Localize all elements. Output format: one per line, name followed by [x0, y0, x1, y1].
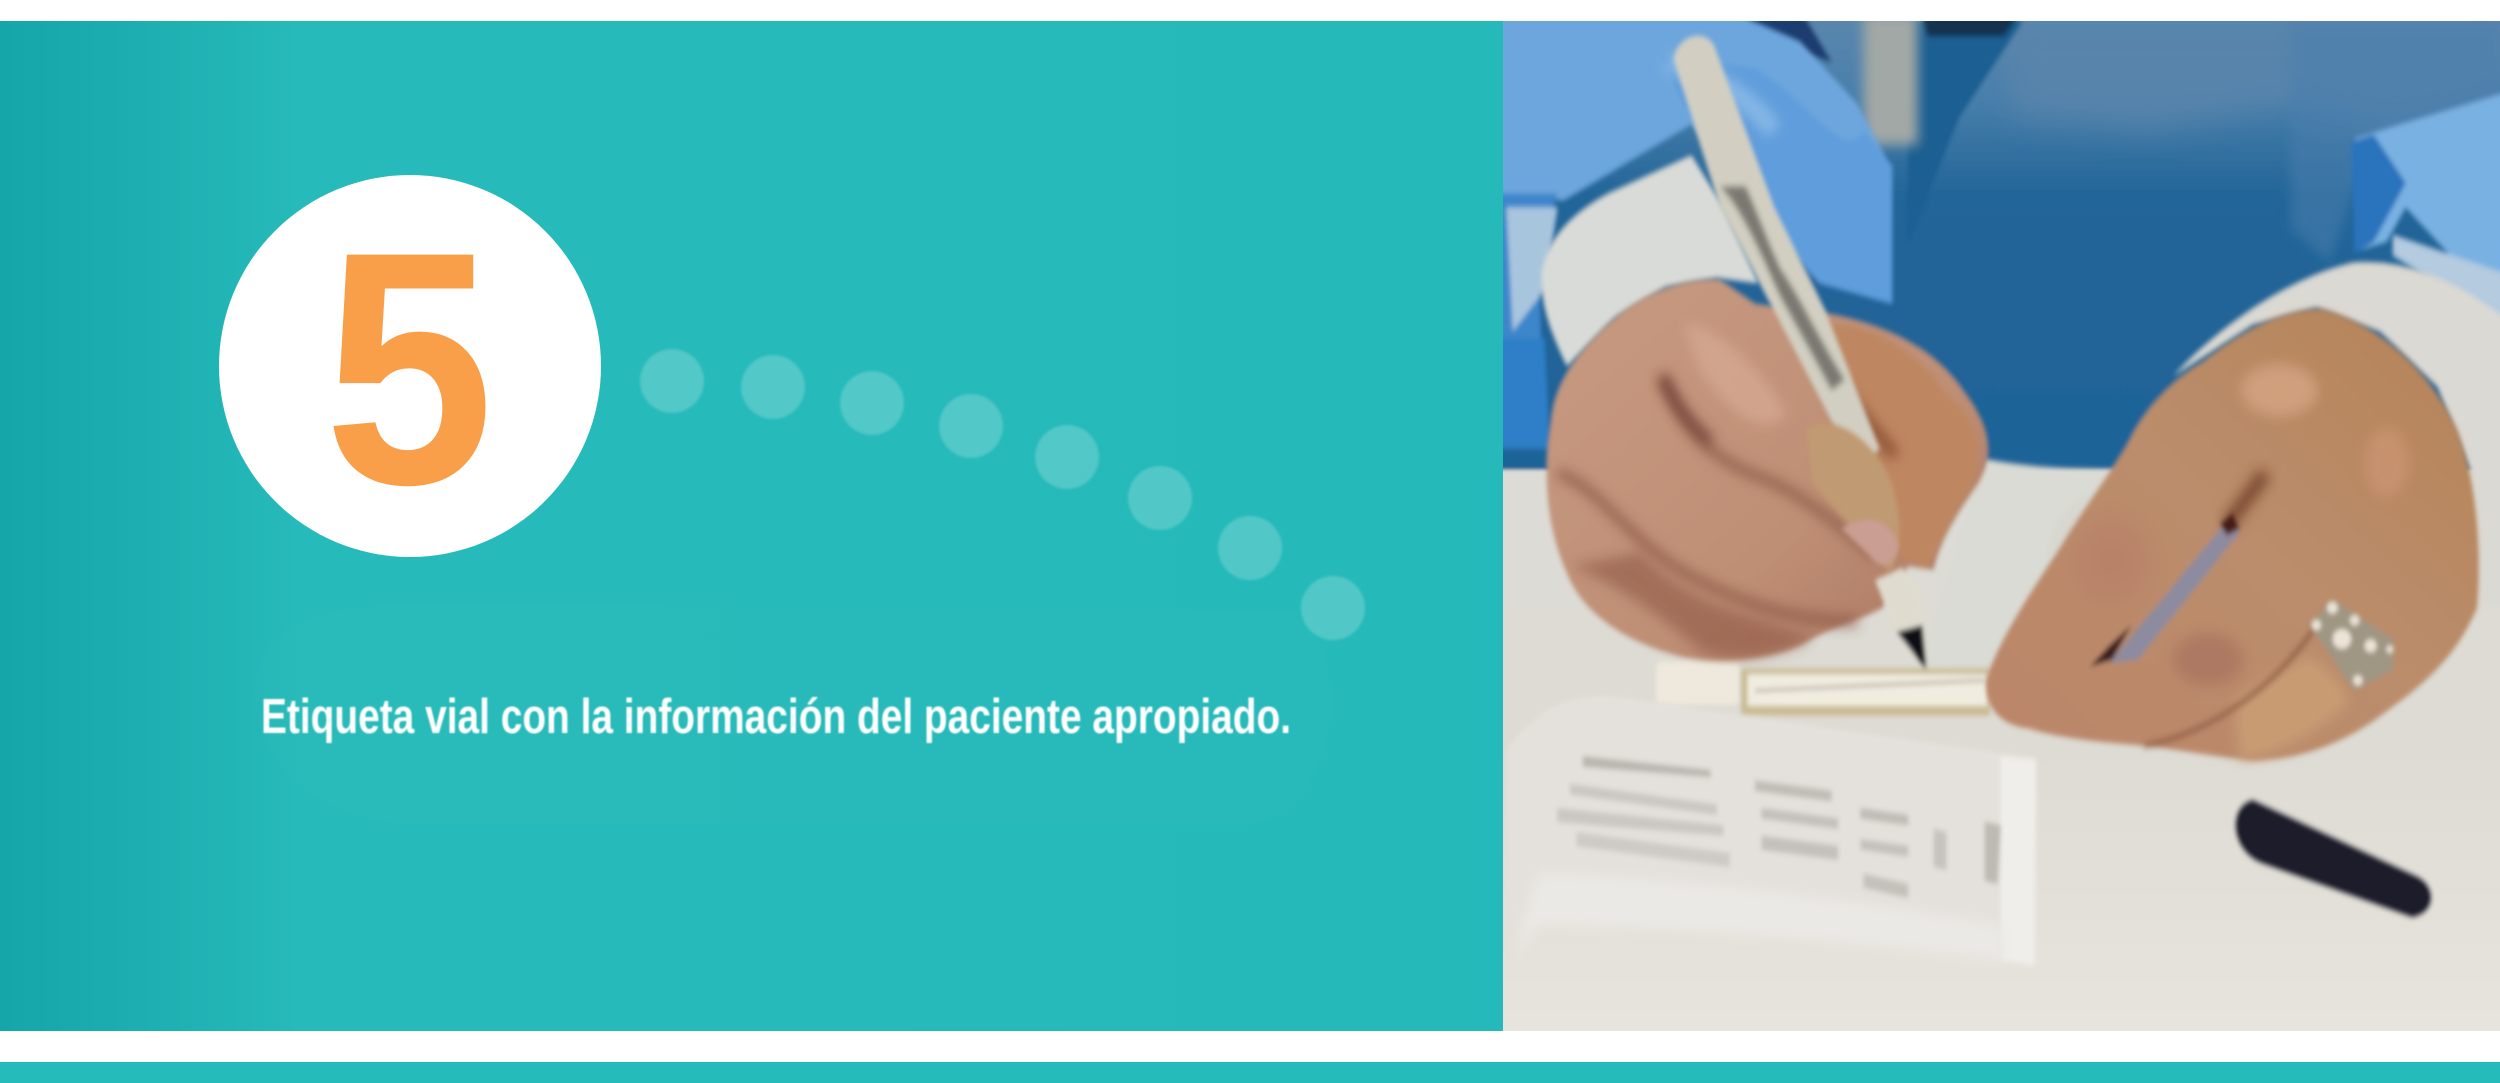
thumb over pen [1806, 424, 1899, 573]
number badge: 5 [324, 182, 494, 554]
left sleeve [1487, 14, 1892, 449]
marker cap [2236, 800, 2431, 917]
ring [2310, 600, 2394, 691]
panel: teal step panel [0, 21, 1503, 1031]
caption text: Etiqueta vial con la información del paciente apropiado. [261, 690, 1291, 744]
left hand [1547, 279, 1988, 661]
soft background blob [255, 603, 1331, 825]
photo: gloved hands labelling a vial [1487, 0, 2500, 1050]
right white cuff [2174, 258, 2500, 472]
right hand [1986, 309, 2479, 761]
table fold edge [1982, 456, 2114, 472]
dotted arc [640, 349, 1365, 640]
right sleeve [2351, 90, 2500, 332]
left white cuff [1541, 155, 1758, 366]
number badge [219, 175, 601, 557]
bottom teal band [0, 1062, 2500, 1083]
gown centre [1487, 0, 2500, 470]
vial body with label [1656, 662, 1990, 716]
ointment tube packet [1526, 712, 2036, 964]
table surface [1503, 466, 2500, 1031]
marker pen [1673, 36, 1926, 669]
